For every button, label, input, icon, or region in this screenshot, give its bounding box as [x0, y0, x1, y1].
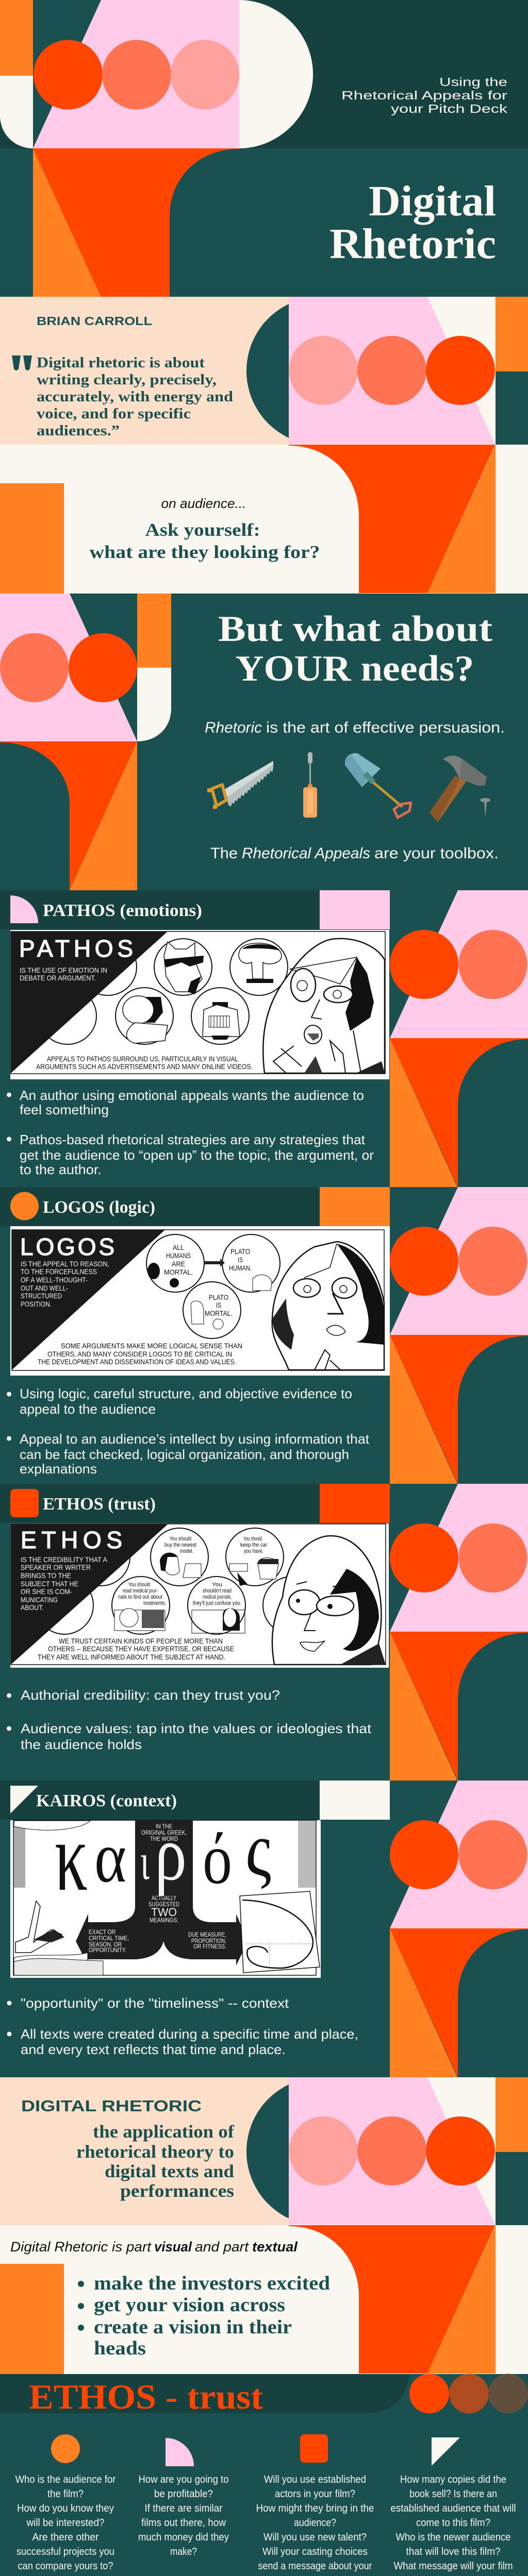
- quote text: Digital rhetoric is about: [37, 354, 205, 371]
- column: book audience questions: What message will your film: [394, 2561, 513, 2572]
- cat, bomb, baby and man vignettes: [123, 942, 282, 1043]
- title: Digital: [369, 177, 496, 225]
- column: book audience questions: book sell? Is there an: [409, 2488, 497, 2500]
- text: ask yourself: Ask yourself:: [145, 520, 260, 540]
- woman face: [272, 1242, 384, 1370]
- column: profit questions: films out there, how: [141, 2517, 226, 2529]
- logic syllogism bubbles: IS: [238, 1256, 243, 1264]
- comic: ethos: MUNICATING: [21, 1596, 58, 1604]
- column: audience questions: will be interested?: [26, 2517, 105, 2529]
- icon: screwdriver: [303, 752, 317, 818]
- bullets: logos: Appeal to an audience’s intellect by using information that: [20, 1431, 370, 1447]
- heading: but what about your needs: [218, 609, 492, 689]
- comic: ethos: OTHERS -- BECAUSE THEY HAVE EXPERTISE, OR BECAUSE: [48, 1645, 234, 1653]
- comic: logos: THE DEVELOPMENT AND DISSEMINATION OF IDEAS AND VALUES.: [38, 1358, 236, 1366]
- logic syllogism bubbles: PLATO: [209, 1293, 228, 1301]
- quote text: writing clearly, precisely,: [37, 371, 217, 388]
- greek word: ι: [140, 1833, 150, 1890]
- greek word: ρ: [155, 1811, 187, 1896]
- comic: ethos: [10, 1523, 389, 1668]
- logic syllogism bubbles: HUMAN.: [229, 1264, 252, 1272]
- subtitle: Using the: [439, 75, 507, 89]
- comic: logos: LOGOS: [20, 1233, 114, 1260]
- text: toolbox: Rhetorical Appeals: [242, 845, 370, 862]
- bullets: pathos: feel something: [20, 1102, 109, 1117]
- text: definition: [76, 2122, 235, 2201]
- column: audience questions: [15, 2474, 116, 2572]
- column: audience questions: How do you know they: [17, 2503, 114, 2514]
- bullets: goals: heads: [94, 2337, 146, 2359]
- column: book audience questions: How many copies did the: [400, 2474, 506, 2485]
- woman face: [263, 939, 385, 1073]
- speech vignettes: they'll just confuse you.: [193, 1600, 241, 1606]
- quote text: [37, 354, 233, 439]
- bullets: ethos: Authorial credibility: can they trust you?: [21, 1687, 280, 1703]
- bullets: kairos: [7, 1995, 358, 2057]
- text: part visual part textual: [10, 2239, 298, 2255]
- comic: pathos: IS THE USE OF EMOTION IN: [20, 966, 107, 974]
- comic: logos: OTHERS, AND MANY CONSIDER LOGOS TO BE CRITICAL IN: [47, 1350, 232, 1358]
- bullets: goals: make the investors excited: [94, 2273, 330, 2294]
- heading: ethos - trust: ETHOS - trust: [29, 2377, 263, 2416]
- column: profit questions: If there are similar: [144, 2503, 223, 2514]
- speech vignettes: you have.: [244, 1548, 263, 1554]
- text: part visual part textual: and part: [195, 2239, 250, 2255]
- heading: pathos emotions: [0, 890, 390, 929]
- column: casting questions: actors in your film?: [275, 2488, 355, 2500]
- comic: pathos: PATHOS: [19, 935, 133, 962]
- bullets: pathos: get the audience to “open up” to the topic, the argument, or: [20, 1147, 374, 1163]
- panel: hero top band: [0, 0, 528, 148]
- heading: pathos emotions: PATHOS (emotions): [43, 901, 202, 920]
- greek word: α: [94, 1818, 126, 1897]
- speech vignettes: nals to find out about: [118, 1594, 162, 1600]
- icon: shovel: [345, 753, 411, 818]
- heading: logos logic: LOGOS (logic): [43, 1198, 155, 1217]
- logic syllogism bubbles: [146, 1234, 280, 1338]
- column: casting questions: How might they bring in the: [256, 2503, 374, 2514]
- comic: logos: IS THE APPEAL TO REASON,: [21, 1260, 109, 1268]
- column: profit questions: [138, 2474, 229, 2557]
- bullets: goals: create a vision in their: [94, 2316, 292, 2338]
- icon: saw: [207, 761, 273, 809]
- column: casting questions: Will you use established: [264, 2474, 366, 2485]
- comic: kairos: IN THE: [156, 1823, 172, 1830]
- comic: kairos: EXACT OR: [89, 1928, 116, 1936]
- heading: but what about your needs: YOUR needs?: [235, 649, 474, 689]
- heading: ethos - trust: [0, 2374, 528, 2416]
- comic: ethos: IS THE CREDIBILITY THAT A: [21, 1555, 108, 1564]
- bullets: logos: can be fact checked, logical organization, and thorough: [20, 1447, 349, 1462]
- column: audience questions: can compare yours to?: [18, 2561, 113, 2572]
- panel: right decoration pathos: [390, 890, 528, 1187]
- panel: right decoration kairos: [390, 1781, 528, 2077]
- subtitle: your Pitch Deck: [391, 102, 508, 115]
- column: audience questions: successful projects you: [16, 2546, 114, 2557]
- comic: ethos: OR SHE IS COM-: [21, 1587, 72, 1596]
- comic: ethos: WE TRUST CERTAIN KINDS OF PEOPLE MORE THAN: [59, 1637, 223, 1645]
- comic: ethos: ABOUT.: [21, 1603, 44, 1612]
- heading: ethos trust: ETHOS (trust): [43, 1495, 156, 1514]
- bullets: pathos: An author using emotional appeals wants the audience to: [20, 1088, 364, 1103]
- comic: kairos: THE WORD: [150, 1835, 178, 1842]
- text: definition: the application of: [93, 2122, 234, 2142]
- comic: logos: [10, 1226, 390, 1376]
- golden spiral paper: [240, 1891, 320, 1973]
- column: book audience questions: established audience that will: [391, 2503, 516, 2514]
- text: rhetoric definition: is the art of effective persuasion.: [266, 719, 505, 736]
- heading: kairos context: [0, 1781, 390, 1820]
- column: profit questions: be profitable?: [154, 2488, 213, 2500]
- text: definition: rhetorical theory to: [76, 2142, 234, 2162]
- text: part visual part textual: visual: [154, 2239, 192, 2255]
- greek word: [55, 1803, 271, 1911]
- comic: kairos: OPPORTUNITY.: [89, 1946, 126, 1954]
- text: on audience: on audience...: [161, 496, 246, 511]
- comic: logos: SOME ARGUMENTS MAKE MORE LOGICAL SENSE THAN: [61, 1342, 242, 1350]
- greek word: κ: [55, 1803, 88, 1911]
- text: ask yourself: [90, 520, 320, 562]
- column: audience questions: Who is the audience for: [15, 2474, 116, 2485]
- sundial: [14, 1901, 103, 1975]
- text: definition: digital texts and: [105, 2161, 235, 2181]
- comic: kairos: [10, 1803, 321, 1978]
- bullets: ethos: [7, 1687, 372, 1752]
- comic: kairos: SEASON, OR: [89, 1941, 122, 1948]
- panel: right decoration logos: [390, 1187, 528, 1484]
- speech vignettes: medical journals,: [203, 1594, 232, 1600]
- heading: but what about your needs: But what about: [218, 609, 492, 649]
- bullets: goals: [78, 2273, 330, 2359]
- column: casting questions: Will your casting choices: [262, 2546, 368, 2557]
- text: part visual part textual: textual: [252, 2239, 298, 2255]
- panel: right decoration ethos: [390, 1484, 528, 1781]
- column: audience questions: the film?: [47, 2488, 84, 2500]
- icon: quote marks: [12, 355, 32, 370]
- panel: your needs art: [0, 594, 171, 890]
- column: book audience questions: that will love this film?: [406, 2546, 500, 2557]
- heading: ethos trust: [0, 1484, 390, 1523]
- logic syllogism bubbles: MORTAL.: [164, 1268, 193, 1276]
- bullets: logos: [7, 1386, 370, 1477]
- comic: logos: POSITION.: [21, 1300, 52, 1308]
- comic: ethos: SPEAKER OR WRITER: [21, 1563, 91, 1571]
- bullets: logos: Using logic, careful structure, and objective evidence to: [20, 1386, 352, 1401]
- logic syllogism bubbles: ALL: [173, 1243, 184, 1251]
- speech vignettes: You should: [243, 1536, 262, 1542]
- quote text: accurately, with energy and: [37, 388, 233, 405]
- greek word: ς: [245, 1807, 271, 1892]
- bullets: kairos: "opportunity" or the "timeliness" -- context: [21, 1995, 289, 2011]
- bullets: pathos: [7, 1088, 374, 1177]
- comic: kairos: ORIGINAL GREEK,: [141, 1829, 187, 1836]
- column: book audience questions: come to this film?: [416, 2517, 490, 2529]
- speech vignettes: [114, 1536, 278, 1633]
- speech vignettes: shouldn't read: [203, 1588, 232, 1594]
- woman face: [272, 1536, 386, 1665]
- bullets: kairos: All texts were created during a specific time and place,: [21, 2026, 358, 2042]
- bullets: kairos: and every text reflects that time and place.: [21, 2042, 286, 2057]
- comic: kairos: TWO: [151, 1906, 177, 1919]
- comic: kairos: ACTUALLY: [152, 1894, 176, 1902]
- heading: digital rhetoric: DIGITAL RHETORIC: [21, 2097, 202, 2115]
- comic: pathos: APPEALS TO PATHOS SURROUND US, PARTICULARLY IN VISUAL: [47, 1055, 238, 1063]
- speech vignettes: model.: [180, 1548, 193, 1554]
- heading: kairos context: KAIROS (context): [36, 1791, 177, 1810]
- column: audience questions: Are there other: [32, 2532, 99, 2543]
- subtitle: [341, 75, 508, 115]
- column: casting questions: send a message about your: [258, 2561, 372, 2572]
- bullets: goals: get your vision across: [94, 2294, 285, 2316]
- logic syllogism bubbles: IS: [216, 1301, 221, 1309]
- comic: ethos: BRINGS TO THE: [21, 1571, 71, 1580]
- bullets: ethos: the audience holds: [21, 1737, 142, 1752]
- column: book audience questions: Who is the newer audience: [396, 2532, 510, 2543]
- comic: kairos: SUGGESTED: [148, 1901, 179, 1908]
- comic: pathos: ARGUMENTS SUCH AS ADVERTISEMENTS AND MANY ONLINE VIDEOS.: [36, 1062, 253, 1071]
- speech vignettes: You: [212, 1582, 222, 1588]
- quote text: voice, and for specific: [37, 405, 191, 422]
- bullets: logos: explanations: [20, 1461, 97, 1477]
- heading: logos logic: [0, 1187, 390, 1226]
- comic: kairos: OR FITNESS.: [193, 1943, 226, 1950]
- comic: pathos: DEBATE OR ARGUMENT.: [20, 974, 96, 982]
- comic: kairos: MEANINGS:: [150, 1917, 178, 1924]
- subtitle: Rhetorical Appeals for: [341, 89, 507, 102]
- panel: hero title block shapes: [33, 148, 239, 297]
- comic: kairos: CRITICAL TIME,: [89, 1935, 129, 1942]
- column: casting questions: [256, 2474, 374, 2576]
- logic syllogism bubbles: PLATO: [230, 1247, 250, 1256]
- comic: logos: OF A WELL-THOUGHT-: [21, 1276, 88, 1284]
- comic: logos: TO THE FORCEFULNESS: [21, 1267, 97, 1276]
- column: casting questions: audience?: [294, 2517, 336, 2529]
- logic syllogism bubbles: HUMANS: [166, 1251, 191, 1260]
- column: profit questions: make?: [170, 2546, 197, 2557]
- quote text: audiences.”: [37, 422, 120, 439]
- greek word: ό: [203, 1819, 232, 1899]
- logic syllogism bubbles: ARE: [172, 1260, 185, 1268]
- text: ask yourself: what are they looking for?: [90, 542, 320, 562]
- column: profit questions: How are you going to: [138, 2474, 229, 2485]
- speech vignettes: You should: [170, 1536, 191, 1542]
- column icons: ethos: [51, 2434, 460, 2466]
- panel: audience section: [0, 445, 528, 594]
- text: toolbox: [210, 845, 499, 862]
- comic: logos: OUT AND WELL-: [21, 1284, 68, 1292]
- speech vignettes: keep the car: [240, 1542, 267, 1548]
- comic: kairos: DUE MEASURE,: [188, 1931, 226, 1938]
- panel: digital rhetoric section art: [0, 2077, 528, 2374]
- column: profit questions: much money did they: [138, 2532, 229, 2543]
- column: casting questions: Will you use new talent?: [263, 2532, 367, 2543]
- comic: pathos: [10, 930, 389, 1079]
- comic: ethos: THEY ARE WELL INFORMED ABOUT THE SUBJECT AT HAND.: [38, 1653, 225, 1661]
- speech vignettes: You should: [128, 1582, 150, 1588]
- icon: hammer and nail: [430, 755, 490, 822]
- title: Rhetoric: [329, 220, 496, 268]
- speech vignettes: read medical jour-: [123, 1588, 158, 1594]
- speech vignettes: treatments.: [143, 1600, 166, 1606]
- comic: ethos: SUBJECT THAT HE: [21, 1580, 78, 1588]
- comic: logos: STRUCTURED: [21, 1292, 62, 1300]
- logic syllogism bubbles: MORTAL.: [205, 1309, 233, 1317]
- text: part visual part textual: Digital Rhetoric is part: [10, 2239, 152, 2255]
- bullets: pathos: to the author.: [20, 1162, 102, 1177]
- comic: ethos: ETHOS: [21, 1527, 122, 1553]
- panel: quote section: [0, 297, 528, 445]
- column: book audience questions: [391, 2474, 516, 2576]
- author name: BRIAN CARROLL: [37, 314, 152, 328]
- text: toolbox: The: [210, 845, 238, 862]
- speech vignettes: buy the newest: [164, 1542, 196, 1548]
- text: rhetoric definition: Rhetoric: [205, 719, 262, 736]
- text: definition: performances: [120, 2181, 234, 2201]
- bullets: ethos: Audience values: tap into the values or ideologies that: [21, 1721, 372, 1736]
- title: [329, 177, 496, 268]
- bullets: logos: appeal to the audience: [20, 1401, 156, 1417]
- comic: kairos: PROPORTION,: [191, 1937, 226, 1944]
- text: toolbox: are your toolbox.: [374, 845, 499, 862]
- bullets: pathos: Pathos-based rhetorical strategies are any strategies that: [20, 1132, 366, 1147]
